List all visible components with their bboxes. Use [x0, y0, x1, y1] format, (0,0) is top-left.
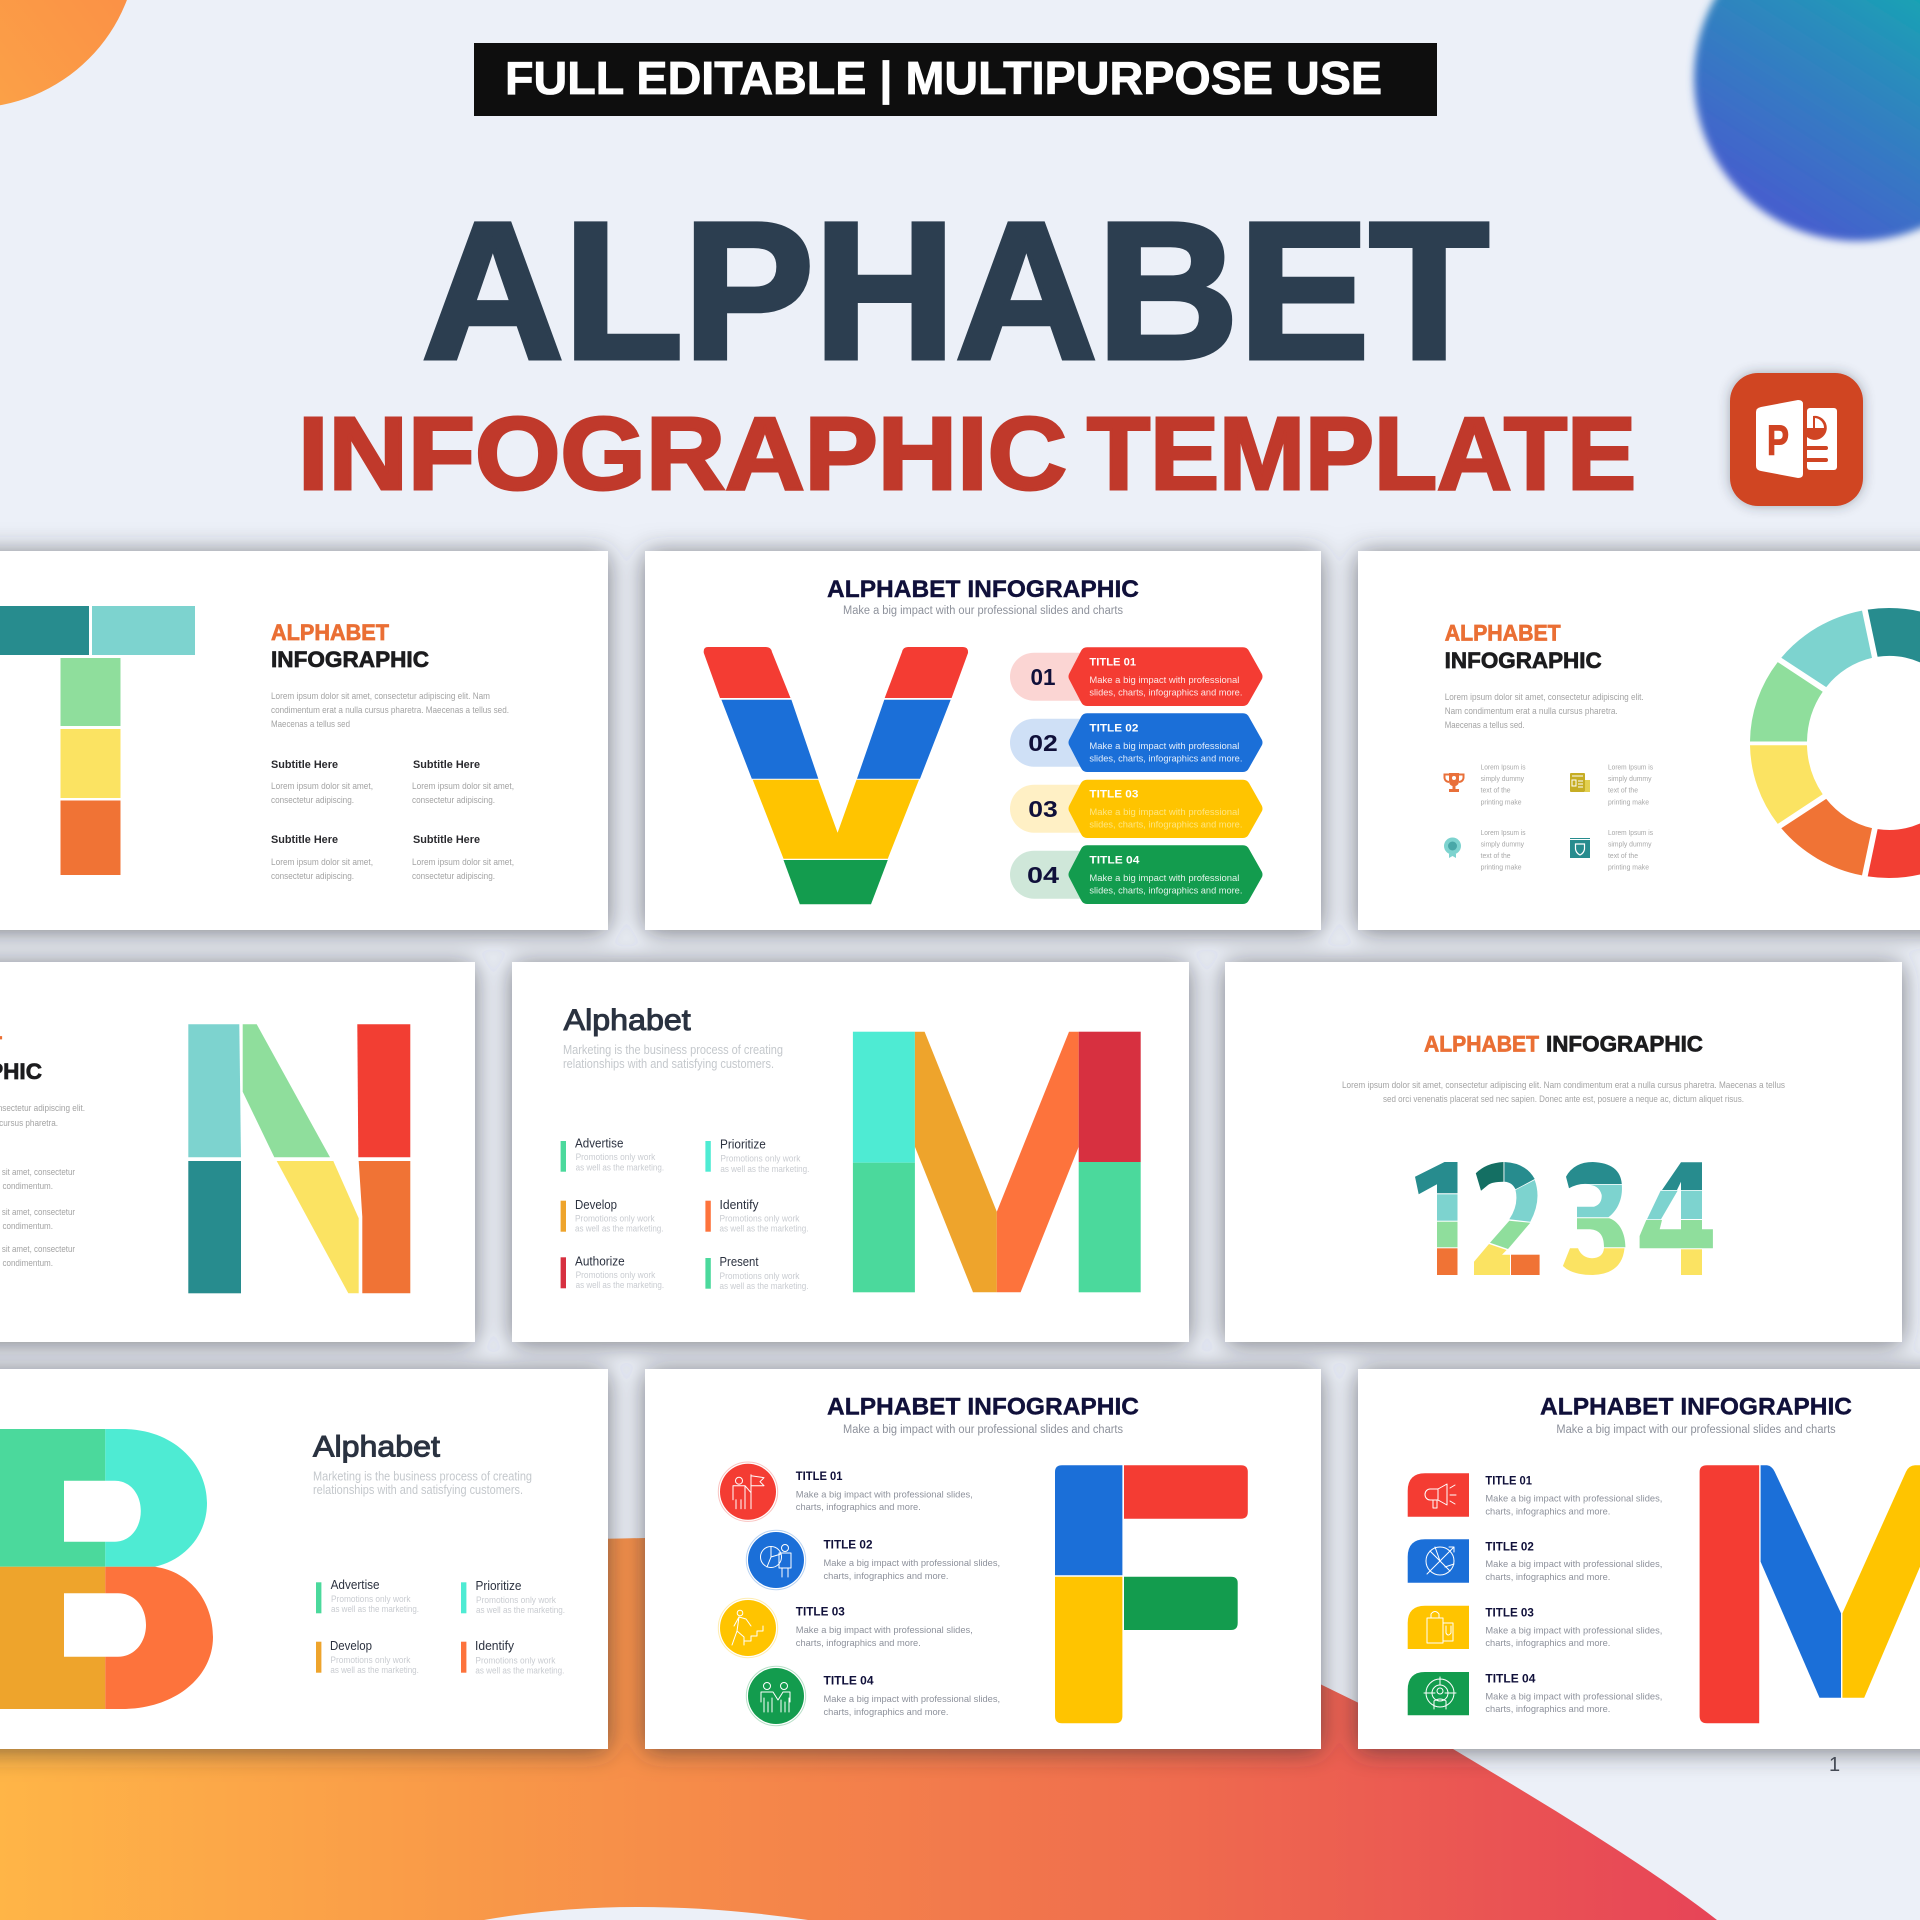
list item 02: Make a big impact with professional — [1089, 741, 1239, 752]
list item 03: Make a big impact with professional — [1089, 807, 1239, 818]
panel: letter T — [0, 551, 608, 930]
panel: letter M teal — [512, 962, 1189, 1342]
icon captions: simply dummy — [1481, 840, 1524, 848]
item: advertise: Advertise — [575, 1136, 623, 1150]
heading — [1424, 1032, 1703, 1057]
item: authorize: Authorize — [575, 1254, 625, 1268]
list item 01: TITLE 01 — [1089, 656, 1136, 668]
item: develop: Develop — [575, 1198, 617, 1212]
item: advertise: Advertise — [331, 1578, 380, 1592]
item: advertise — [316, 1578, 419, 1614]
letter M shape — [1700, 1465, 1920, 1723]
icon: powerpoint — [1730, 373, 1863, 506]
subheading: relationships with and satisfying customers. — [313, 1483, 523, 1497]
item: advertise: as well as the marketing. — [331, 1604, 419, 1614]
letter B shape — [0, 1429, 213, 1709]
subtitles — [271, 759, 514, 882]
decorative orange circle top left — [0, 0, 138, 108]
item: present: as well as the marketing. — [720, 1281, 808, 1291]
subtitles: Lorem ipsum dolor sit amet, — [271, 857, 373, 868]
icon captions: Lorem Ipsum is — [1481, 762, 1526, 772]
item: develop: Promotions only work — [330, 1655, 411, 1665]
item 03: charts, infographics and more. — [1485, 1638, 1610, 1649]
item: develop — [316, 1639, 419, 1675]
item: identify: Promotions only work — [475, 1655, 556, 1665]
item: advertise: Promotions only work — [331, 1594, 411, 1604]
icon: trophy — [1444, 773, 1464, 792]
subtitles: Lorem ipsum dolor sit amet, — [271, 781, 373, 792]
list item 02: 02 — [1028, 730, 1058, 756]
icon captions: simply dummy — [1481, 774, 1524, 783]
item 04: charts, infographics and more. — [824, 1707, 948, 1718]
item 01: charts, infographics and more. — [1485, 1506, 1610, 1518]
subtitles: consectetur adipiscing. — [412, 795, 495, 806]
letter T shape — [0, 606, 195, 875]
heading: ALPHABET — [1445, 621, 1561, 646]
icon captions: printing make — [1608, 862, 1649, 872]
number 3 — [1563, 1162, 1625, 1275]
subheading: relationships with and satisfying customers. — [563, 1057, 774, 1071]
subheading — [563, 1043, 783, 1071]
list item 01: 01 — [1030, 664, 1056, 690]
item: identify: as well as the marketing. — [475, 1665, 564, 1675]
item: develop — [561, 1198, 664, 1234]
item 03 — [1408, 1606, 1662, 1649]
heading — [1445, 621, 1602, 673]
panel: letter N — [0, 962, 475, 1342]
letter M shape — [853, 1032, 1141, 1292]
heading: INFOGRAPHIC — [1546, 1032, 1703, 1057]
body text — [271, 691, 509, 730]
item: prioritize: Promotions only work — [720, 1154, 801, 1164]
panel: numbers 1234 — [1225, 962, 1902, 1342]
subtitles: Lorem ipsum dolor sit amet, — [412, 781, 514, 792]
subtitle — [298, 396, 1636, 511]
item 01 — [1408, 1473, 1662, 1518]
item 02 — [1408, 1539, 1662, 1583]
heading: ALPHABET INFOGRAPHIC — [827, 576, 1139, 603]
item: identify — [461, 1639, 564, 1675]
body text: Lorem ipsum dolor sit amet, consectetur adipiscing elit. Nam condimentum erat a nulla cursus pharetra. Maecenas a tellus — [1342, 1080, 1785, 1091]
item 02: Make a big impact with professional slides, — [1485, 1559, 1662, 1570]
body text: Nam condimentum erat a nulla cursus pharetra. — [1445, 706, 1618, 717]
item 03: TITLE 03 — [1485, 1608, 1534, 1620]
heading: INFOGRAPHIC — [1445, 648, 1602, 673]
item 01: Make a big impact with professional slides, — [796, 1490, 973, 1500]
item 01: TITLE 01 — [796, 1471, 843, 1483]
item: prioritize — [461, 1579, 565, 1615]
heading: Alphabet — [313, 1431, 440, 1464]
item 01: charts, infographics and more. — [796, 1502, 921, 1513]
list item 04: TITLE 04 — [1089, 854, 1140, 866]
item: identify: Identify — [475, 1639, 515, 1653]
list item 03: 03 — [1028, 796, 1058, 822]
item: advertise: Promotions only work — [576, 1152, 656, 1162]
icon captions: Lorem Ipsum is — [1481, 828, 1526, 837]
icon captions: text of the — [1608, 786, 1638, 794]
item 03: Make a big impact with professional slides, — [1485, 1625, 1662, 1636]
item 03: TITLE 03 — [796, 1606, 845, 1618]
subtitles: consectetur adipiscing. — [271, 795, 354, 806]
item: present: Promotions only work — [720, 1271, 800, 1281]
icon captions: text of the — [1608, 851, 1638, 860]
item: identify: as well as the marketing. — [720, 1224, 808, 1234]
main title: ALPHABET — [422, 182, 1489, 400]
banner — [474, 43, 1437, 116]
subtitles: Subtitle Here — [271, 834, 338, 846]
number 4 — [1640, 1162, 1713, 1275]
item 04: Make a big impact with professional slides, — [824, 1694, 1000, 1705]
list item 02: slides, charts, infographics and more. — [1089, 754, 1242, 764]
icon: badge — [1444, 838, 1461, 858]
item 02: charts, infographics and more. — [1485, 1572, 1610, 1583]
item: identify — [705, 1198, 808, 1234]
subheading — [313, 1470, 532, 1497]
list item 04: Make a big impact with professional — [1089, 873, 1239, 884]
list item 01: slides, charts, infographics and more. — [1089, 688, 1242, 698]
number 1 — [1415, 1162, 1458, 1275]
subtitles: consectetur adipiscing. — [271, 871, 354, 882]
clipped heading — [0, 1032, 42, 1084]
decorative orange to red wave at bottom — [0, 1537, 1717, 1920]
body text: sed orci venenatis placerat sed nec sapien. Donec ante est, posuere a neque ac, dictum aliquet risus. — [1383, 1094, 1744, 1105]
item 02: TITLE 02 — [1485, 1542, 1534, 1554]
heading: ALPHABET INFOGRAPHIC — [827, 1394, 1139, 1421]
body text: Maecenas a tellus sed. — [1445, 720, 1525, 731]
item: prioritize: as well as the marketing. — [476, 1605, 565, 1615]
letter N shape — [188, 1024, 410, 1293]
heading — [271, 620, 429, 672]
item 02 — [746, 1530, 1000, 1590]
panel: letter B — [0, 1369, 608, 1749]
subtitles: Subtitle Here — [413, 834, 480, 846]
heading: INFOGRAPHIC — [271, 647, 429, 672]
list item 02 — [1010, 713, 1262, 772]
item 02: Make a big impact with professional slides, — [824, 1558, 1000, 1569]
icon captions: Lorem Ipsum is — [1608, 828, 1653, 837]
panel: letter M primary — [1358, 1369, 1920, 1749]
subtitles: Subtitle Here — [413, 759, 480, 771]
panel: letter F — [645, 1369, 1321, 1749]
subtitle: TEMPLATE — [1087, 396, 1636, 511]
item: present: Present — [720, 1255, 759, 1269]
subheading: Make a big impact with our professional slides and charts — [843, 1424, 1123, 1436]
subheading: Make a big impact with our professional slides and charts — [1556, 1424, 1836, 1436]
subheading: Marketing is the business process of creating — [313, 1470, 532, 1484]
list item 03: slides, charts, infographics and more. — [1089, 820, 1242, 830]
item 01 — [718, 1462, 973, 1521]
letter V shape — [704, 647, 968, 904]
panel: letter V — [645, 551, 1321, 930]
item: develop: Develop — [330, 1639, 372, 1653]
icon captions — [1481, 762, 1653, 872]
body text: Lorem ipsum dolor sit amet, consectetur adipiscing elit. Nam — [271, 691, 490, 702]
item: authorize: Promotions only work — [576, 1270, 656, 1280]
item: prioritize — [705, 1138, 809, 1174]
subtitle: INFOGRAPHIC — [298, 396, 1067, 511]
icon: powerpoint: P — [1767, 417, 1789, 465]
heading: ALPHABET INFOGRAPHIC — [1540, 1394, 1852, 1421]
body text: condimentum erat a nulla cursus pharetra. Maecenas a tellus sed. — [271, 705, 509, 716]
subtitles: Subtitle Here — [271, 759, 338, 771]
icon captions: Lorem Ipsum is — [1608, 762, 1653, 772]
body text: Lorem ipsum dolor sit amet, consectetur adipiscing elit. — [1445, 692, 1644, 703]
item 04: TITLE 04 — [1485, 1674, 1536, 1686]
item: advertise: as well as the marketing. — [576, 1162, 664, 1172]
donut chart — [1750, 608, 1920, 878]
item: authorize: as well as the marketing. — [576, 1280, 664, 1290]
item: identify: Identify — [720, 1198, 759, 1212]
item: develop: Promotions only work — [575, 1214, 655, 1224]
list item 04 — [1010, 845, 1262, 904]
item: prioritize: Prioritize — [720, 1138, 766, 1152]
icon captions: simply dummy — [1608, 840, 1652, 848]
list item 03 — [1010, 780, 1262, 838]
item 04: Make a big impact with professional slides, — [1485, 1692, 1662, 1702]
item 04: charts, infographics and more. — [1485, 1704, 1610, 1715]
list item 04: slides, charts, infographics and more. — [1089, 886, 1242, 896]
icon captions: printing make — [1481, 862, 1522, 872]
page number: 1 — [1829, 1754, 1840, 1776]
panel: donut letter O — [1358, 551, 1920, 930]
item 02: charts, infographics and more. — [824, 1571, 948, 1582]
icon captions: text of the — [1481, 851, 1511, 860]
subheading: Make a big impact with our professional slides and charts — [843, 605, 1123, 617]
body text — [1342, 1080, 1785, 1105]
item: develop: as well as the marketing. — [330, 1665, 419, 1675]
banner: FULL EDITABLE | MULTIPURPOSE USE — [505, 52, 1382, 104]
subtitles: Lorem ipsum dolor sit amet, — [412, 857, 514, 868]
item: prioritize: as well as the marketing. — [720, 1164, 809, 1174]
item 01: TITLE 01 — [1485, 1476, 1533, 1488]
heading: ALPHABET — [271, 620, 390, 645]
item 02: TITLE 02 — [824, 1540, 872, 1552]
item: advertise — [561, 1136, 664, 1172]
heading: Alphabet — [564, 1004, 691, 1037]
body text: Maecenas a tellus sed — [271, 719, 350, 730]
icon captions: text of the — [1481, 786, 1511, 794]
list item 01 — [1010, 647, 1262, 706]
heading: ALPHABET — [1424, 1032, 1540, 1057]
item 04 — [1408, 1672, 1662, 1715]
item 03 — [718, 1598, 973, 1658]
body text — [1445, 692, 1644, 731]
item 01: Make a big impact with professional slides, — [1485, 1494, 1662, 1504]
icon captions: printing make — [1481, 798, 1522, 806]
item: identify: Promotions only work — [720, 1214, 800, 1224]
item 03: charts, infographics and more. — [796, 1638, 921, 1649]
item: develop: as well as the marketing. — [575, 1224, 664, 1234]
item: prioritize: Promotions only work — [476, 1595, 556, 1605]
icon captions: printing make — [1608, 798, 1649, 806]
list item 03: TITLE 03 — [1089, 788, 1138, 800]
item: prioritize: Prioritize — [476, 1579, 522, 1593]
item 03: Make a big impact with professional slides, — [796, 1625, 973, 1636]
item: present — [705, 1255, 808, 1291]
icon captions: simply dummy — [1608, 774, 1652, 783]
list item 04: 04 — [1027, 862, 1059, 888]
icon: browser shield — [1570, 838, 1590, 858]
subtitles: consectetur adipiscing. — [412, 871, 495, 882]
subheading: Marketing is the business process of creating — [563, 1043, 783, 1057]
item 04: TITLE 04 — [824, 1676, 874, 1688]
item: authorize — [561, 1254, 664, 1290]
number 2 — [1474, 1162, 1540, 1275]
decorative blue gradient circle top right — [1694, 0, 1920, 241]
clipped body text — [0, 1103, 85, 1269]
icon: newspaper — [1570, 773, 1590, 792]
list item 01: Make a big impact with professional — [1089, 675, 1239, 686]
letter F shape — [1055, 1465, 1248, 1723]
item 04 — [746, 1666, 1000, 1726]
list item 02: TITLE 02 — [1089, 722, 1138, 734]
